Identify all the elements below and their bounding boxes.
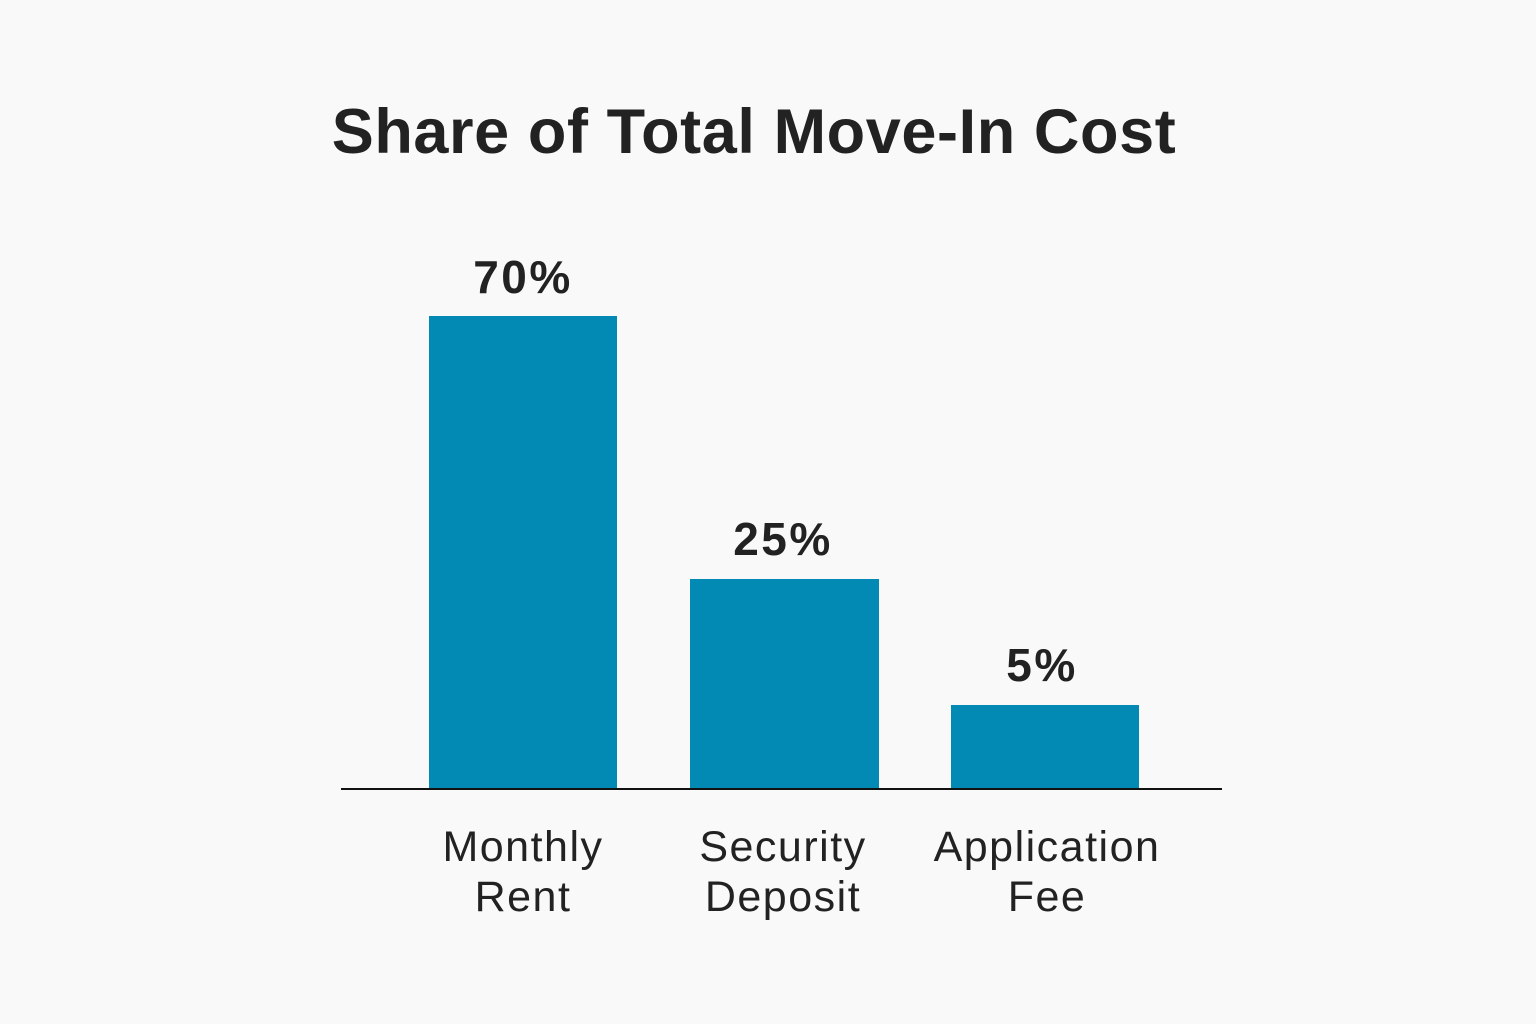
title: Share of Total Move-In Cost <box>332 97 1176 167</box>
category label: Security Deposit: Security <box>699 823 867 871</box>
category label: Application Fee: Application <box>934 823 1160 871</box>
value label: 70%: 70% <box>473 251 573 303</box>
value label: 25%: 25% <box>733 513 833 565</box>
value label: 5%: 5% <box>1006 639 1078 691</box>
bar: Monthly Rent <box>429 316 617 789</box>
category label: Application Fee: Fee <box>1008 873 1086 921</box>
x axis <box>341 788 1222 790</box>
bar: Application Fee <box>951 705 1139 789</box>
category label: Application Fee <box>934 823 1160 921</box>
bar chart <box>341 251 1222 921</box>
category label: Monthly Rent: Monthly <box>442 823 604 871</box>
category label: Security Deposit <box>699 823 867 921</box>
category label: Monthly Rent: Rent <box>475 873 571 921</box>
bar: Security Deposit <box>690 579 879 789</box>
category label: Security Deposit: Deposit <box>705 873 861 921</box>
category label: Monthly Rent <box>442 823 604 921</box>
